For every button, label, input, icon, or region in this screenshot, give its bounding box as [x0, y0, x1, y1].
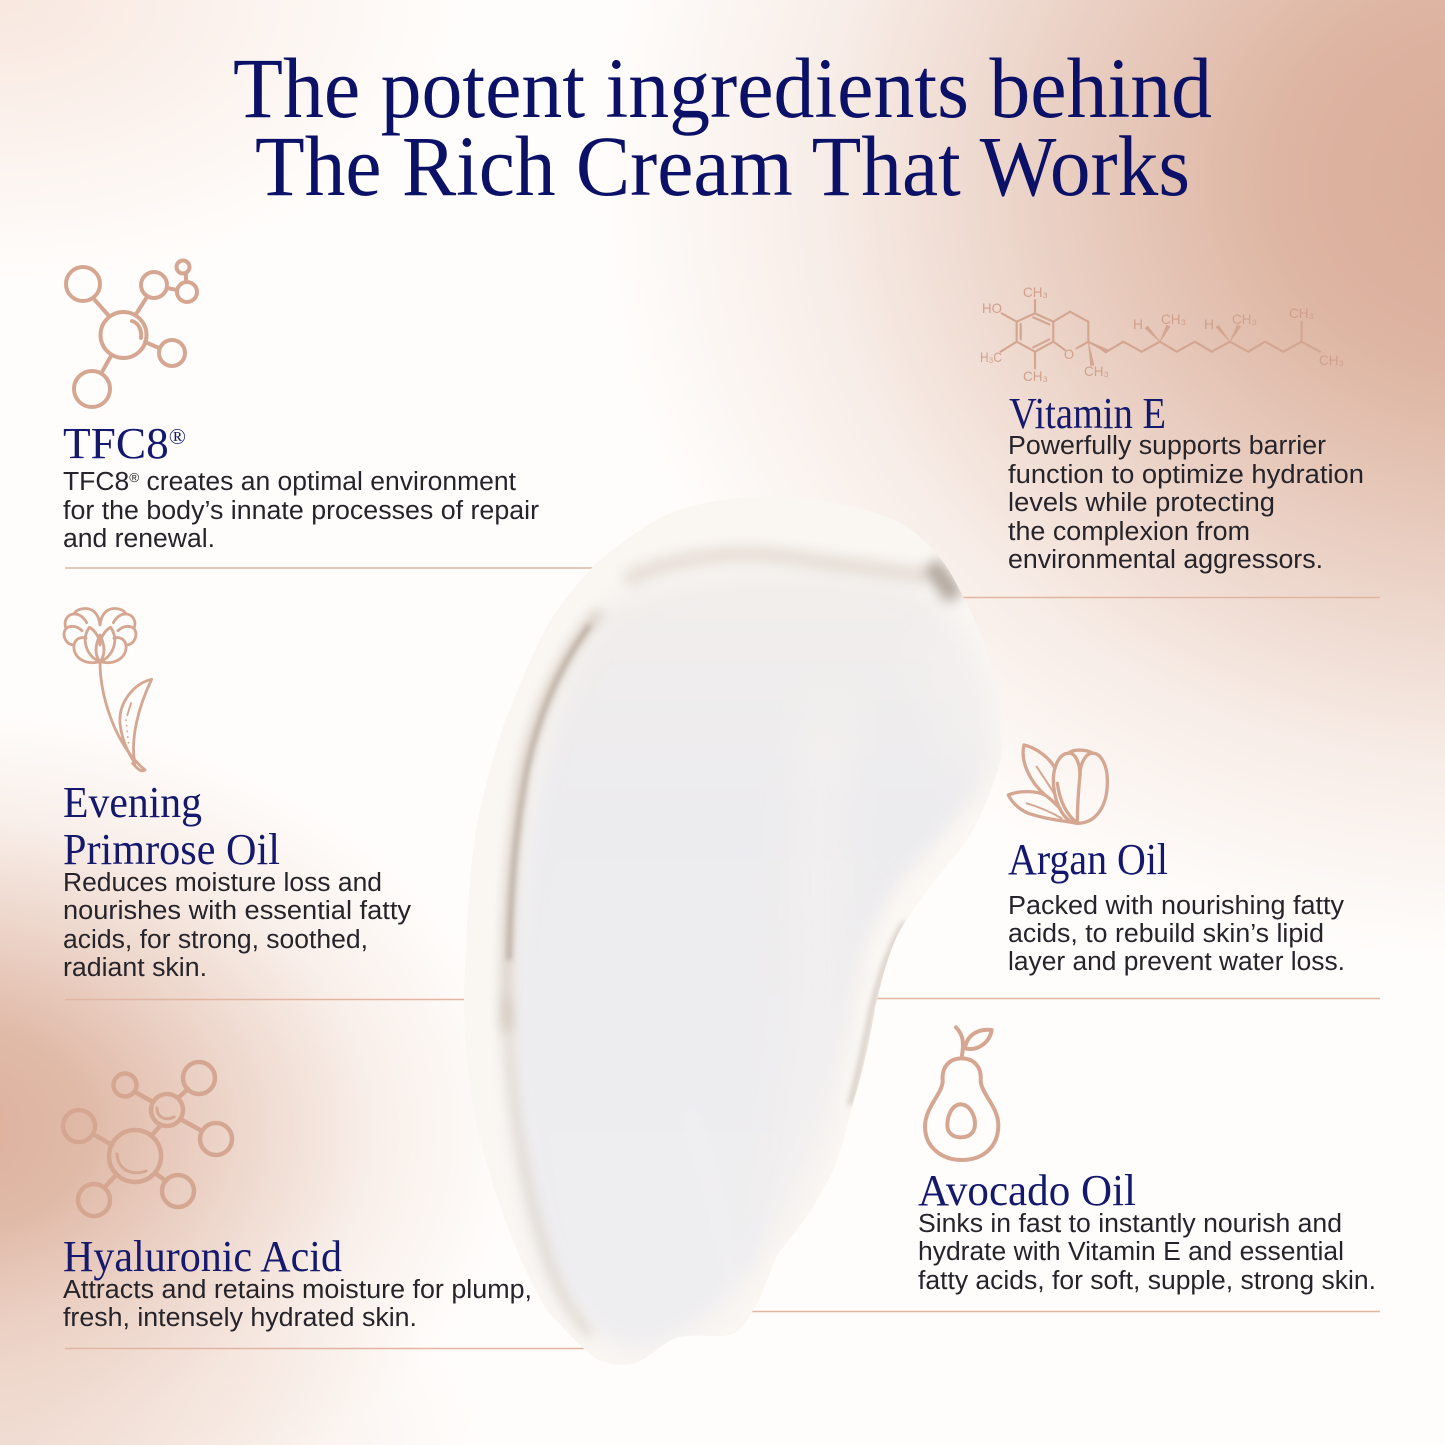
icon: vitamin E structural formula: CH₃: [1289, 305, 1314, 321]
heading: Evening Primrose Oil: Evening: [63, 778, 202, 827]
panel: Vitamin E: [980, 284, 1364, 574]
text: Evening Primrose Oil description: radiant skin.: [63, 954, 207, 982]
icon: vitamin E structural formula: CH₃: [1319, 352, 1344, 368]
text: TFC8 description: TFC8: [63, 468, 127, 496]
text: TFC8 description: for the body’s innate processes of repair: [63, 497, 540, 525]
text: Argan Oil description: acids, to rebuild skin’s lipid: [1008, 920, 1324, 948]
text: Evening Primrose Oil description: [63, 869, 411, 982]
text: Avocado Oil description: [918, 1210, 1376, 1295]
heading: Evening Primrose Oil: Primrose Oil: [63, 825, 280, 874]
text: Vitamin E description: [1008, 432, 1364, 574]
icon: vitamin E structural formula: CH₃: [1232, 311, 1257, 327]
text: Vitamin E description: levels while protecting: [1008, 489, 1275, 517]
title: The potent ingredients behind: [233, 40, 1212, 136]
text: Hyaluronic Acid description: fresh, intensely hydrated skin.: [63, 1304, 417, 1332]
icon: primrose flower: [64, 609, 152, 771]
panel: TFC8: [63, 260, 540, 553]
divider rules: [65, 568, 1380, 1348]
panel: Avocado Oil: [918, 1027, 1376, 1295]
panel: Argan Oil: [1008, 745, 1345, 976]
heading: TFC8: TFC8: [63, 419, 166, 468]
heading: Vitamin E: Vitamin E: [1009, 389, 1166, 438]
panel: Evening Primrose Oil: [63, 609, 411, 982]
icon: molecule: [66, 260, 197, 407]
icon: vitamin E structural formula: HO: [982, 300, 1002, 316]
text: Vitamin E description: function to optimize hydration: [1008, 461, 1364, 489]
heading: TFC8: ®: [169, 424, 186, 449]
text: Argan Oil description: layer and prevent water loss.: [1008, 948, 1345, 976]
heading: Hyaluronic Acid: Hyaluronic Acid: [63, 1232, 342, 1281]
text: Hyaluronic Acid description: [63, 1276, 532, 1332]
heading: Avocado Oil: Avocado Oil: [918, 1166, 1136, 1215]
icon: vitamin E structural formula: O: [1064, 346, 1074, 362]
icon: vitamin E structural formula: CH₃: [1084, 363, 1109, 379]
icon: vitamin E structural formula: [980, 284, 1344, 384]
icon: vitamin E structural formula: H₃C: [980, 349, 1002, 365]
text: Argan Oil description: Packed with nourishing fatty: [1008, 892, 1344, 920]
text: Argan Oil description: [1008, 892, 1345, 976]
text: Evening Primrose Oil description: acids, for strong, soothed,: [63, 926, 368, 954]
icon: vitamin E structural formula: CH₃: [1023, 368, 1048, 384]
panel: Hyaluronic Acid: [63, 1062, 532, 1332]
cream swatch: [464, 497, 1002, 1365]
text: Vitamin E description: environmental aggressors.: [1008, 546, 1323, 574]
title: [233, 40, 1212, 214]
text: Avocado Oil description: fatty acids, for soft, supple, strong skin.: [918, 1267, 1376, 1295]
heading: Evening Primrose Oil: [63, 778, 280, 874]
icon: vitamin E structural formula: CH₃: [1023, 284, 1048, 300]
icon: avocado: [925, 1027, 998, 1160]
text: TFC8 description: and renewal.: [63, 525, 215, 553]
text: Avocado Oil description: hydrate with Vitamin E and essential: [918, 1238, 1344, 1266]
heading: Argan Oil: Argan Oil: [1008, 835, 1168, 884]
text: TFC8 description: ®: [129, 470, 140, 485]
text: Vitamin E description: the complexion from: [1008, 518, 1250, 546]
text: TFC8 description: creates an optimal environment: [139, 468, 516, 496]
icon: argan nut and leaves: [1008, 745, 1107, 823]
text: TFC8 description: [63, 468, 540, 553]
text: Vitamin E description: Powerfully supports barrier: [1008, 432, 1327, 460]
text: Evening Primrose Oil description: nourishes with essential fatty: [63, 897, 411, 925]
icon: vitamin E structural formula: H: [1133, 316, 1143, 332]
title: The Rich Cream That Works: [255, 118, 1190, 214]
icon: vitamin E structural formula: H: [1204, 316, 1214, 332]
icon: molecule: [63, 1062, 232, 1216]
text: Hyaluronic Acid description: Attracts and retains moisture for plump,: [63, 1276, 532, 1304]
text: Evening Primrose Oil description: Reduces moisture loss and: [63, 869, 382, 897]
text: Avocado Oil description: Sinks in fast to instantly nourish and: [918, 1210, 1342, 1238]
icon: vitamin E structural formula: CH₃: [1161, 311, 1186, 327]
